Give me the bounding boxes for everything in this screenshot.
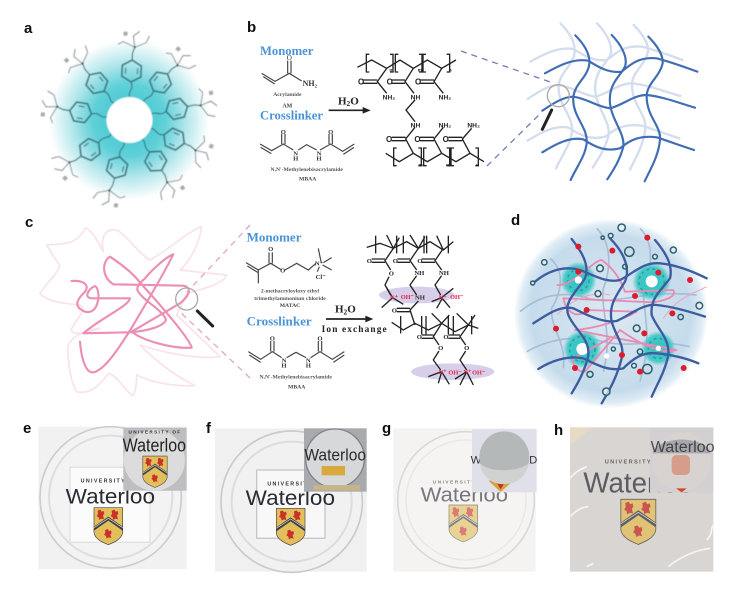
acrylamide molecule: Acrylamide [273,92,302,98]
zoom lines for panel c [180,225,250,378]
MBAA molecule: N,N'-Methylenebisacrylamide [259,374,332,380]
quaternised polymer structure: NH [439,270,450,277]
magnifier [542,85,569,129]
crosslinked polyacrylamide structure: m [446,163,451,169]
quaternised polymer structure: O [417,258,423,265]
photo g: UNIVERSITY [433,479,476,485]
photo f: Waterloo [246,486,335,510]
crosslinker heading: Crosslinker [247,313,312,328]
panel labels [23,19,563,439]
MATAC molecule: Cl⁻ [316,274,326,281]
quaternised polymer structure: O [389,270,394,277]
H2O reaction arrow: 2 [347,99,351,108]
crosslinked polyacrylamide structure [357,54,484,169]
photo e [38,427,187,569]
panel a: functionalised nanoparticle [39,30,219,210]
red ions [553,235,693,375]
quaternised polymer structure: O [443,334,449,341]
photos e and f [38,427,367,572]
magnifier [176,288,213,326]
quaternised polymer structure: OH⁻ [472,369,485,376]
MBAA molecule: O [317,335,323,342]
crosslinker heading: Crosslinker [260,108,323,122]
quaternised polymer structure: O [393,258,398,265]
acrylamide molecule: AM [282,104,293,110]
quaternised polymer structure: O [367,258,372,265]
H2O ion exchange arrow: O [347,304,356,316]
acrylamide molecule: O [287,53,292,62]
crosslinked polyacrylamide structure: n [389,68,392,74]
MBAA molecule: H [281,363,287,370]
photo h: Waterloo [583,468,693,500]
quaternised polymer structure: O [464,345,469,352]
quaternised polymer structure: NH [415,295,426,302]
monomer heading: Monomer [247,230,302,245]
MBAA molecule: N [306,357,311,364]
panel labels: c [25,214,33,231]
crosslinked polyacrylamide structure: O [358,78,364,87]
pink polymer chain [557,260,677,372]
MATAC molecule [246,246,332,309]
panel d: composite hydrogel sphere [514,219,708,409]
MATAC molecule: O [280,267,285,274]
panel labels: d [511,212,520,229]
arms: benzyl ammonium brushes [39,30,219,210]
inset [650,428,715,492]
MBAA molecule: H [293,156,299,163]
monomer heading: Monomer [260,44,314,58]
inset: Waterloo [651,439,715,456]
photo h [570,427,715,572]
quaternised polymer structure: N⁺ [439,295,447,302]
photo f [215,428,367,572]
inset [304,428,367,492]
quaternised polymer structure: N⁺ [439,369,447,376]
light rear network [528,23,683,170]
MATAC molecule: MATAC [280,303,300,309]
crosslinked polyacrylamide structure: NH [411,94,420,101]
H2O reaction arrow [329,95,371,114]
crosslinked polyacrylamide structure: n [476,163,479,169]
crosslinked polyacrylamide structure: O [386,135,392,144]
photo f: UNIVERSITY [267,481,313,487]
MBAA molecule [260,129,354,182]
crosslinked polyacrylamide structure: NH [411,122,420,129]
H2O reaction arrow: O [350,95,359,107]
inset: Waterloo [123,434,186,455]
panel labels: e [23,420,31,437]
crosslinked polyacrylamide structure: O [387,78,393,87]
panel b: chemistry [260,44,484,182]
MBAA molecule: MBAA [288,384,306,390]
quaternised polymer structure: N⁺ [463,369,471,376]
crosslinked polyacrylamide structure: m [418,68,423,74]
panel labels: h [554,422,563,439]
crosslinked polyacrylamide structure: n [449,68,452,74]
MBAA molecule: N [317,150,322,157]
inset: W D [471,454,537,466]
panel c: polymer scribble [40,227,227,395]
photo g: Waterloo [421,484,508,507]
quaternised polymer structure: N⁺ [390,295,398,302]
quaternised polymer structure: NH [414,270,425,277]
zoom lines for panel b [461,51,553,166]
quaternised polymer structure: O [392,307,397,314]
inset [471,429,537,492]
panel b: hydrogel network [528,23,697,181]
dark blue network [533,238,707,403]
water bubbles [531,224,703,395]
MBAA molecule: H [316,156,322,163]
quaternised polymer structure: O [438,345,443,352]
quaternised polymer structure: OH⁻ [450,294,463,301]
quaternised polymer structure: OH⁻ [401,294,414,301]
crosslinked polyacrylamide structure: O [415,78,421,87]
MBAA molecule: MBAA [299,176,317,182]
MBAA molecule: O [270,335,275,342]
crosslinked polyacrylamide structure: O [414,135,421,144]
panel labels: f [206,420,212,437]
crosslinked polyacrylamide structure: NH₂ [439,94,451,101]
white particle cores [575,275,661,359]
white core [106,97,152,143]
crosslinked polyacrylamide structure: O [443,135,449,144]
acrylamide molecule [262,53,318,110]
H2O reaction arrow: H [338,95,347,107]
MBAA molecule: N [282,357,287,364]
quaternised polymer structure [367,235,485,385]
crosslinked polyacrylamide structure: NH₂ [439,122,451,129]
inset [123,428,187,491]
dark front chain [72,254,192,372]
MBAA molecule: O [328,129,333,136]
light rear network [520,228,697,382]
photo e: UNIVERSITY [81,479,126,485]
light rear chain [40,227,227,395]
H2O ion exchange arrow: H [335,304,344,316]
crosslinked polyacrylamide structure: NH₂ [383,94,395,101]
teal nanoparticle glows [560,262,676,368]
MBAA molecule: N,N'-Methylenebisacrylamide [270,167,343,173]
dark front network [542,35,697,181]
inset: Waterloo [304,446,366,465]
photo g [393,428,537,572]
photo e: Waterloo [66,484,155,508]
quaternised polymer structure: OH⁻ [448,369,462,376]
MBAA molecule: O [281,129,286,136]
MATAC molecule: O [268,246,273,253]
MATAC molecule: trimethylammonium chloride [254,296,326,302]
photos g and h [393,427,715,572]
crosslinked polyacrylamide structure: m [418,163,423,169]
panel labels: g [382,420,391,437]
quaternised polymer structure: O [417,334,422,341]
H2O ion exchange arrow: 2 [344,307,348,316]
photo h: UNIVERSITY [605,459,652,465]
H2O ion exchange arrow [322,304,387,335]
acrylamide molecule: NH₂ [303,79,318,88]
panel c: chemistry [246,230,494,390]
crosslinked polyacrylamide structure: NH₂ [467,122,480,129]
MBAA molecule [248,335,344,390]
MBAA molecule: H [306,363,312,370]
MATAC molecule: N⁺ [315,261,324,268]
MATAC molecule: 2-methacryloyloxy ethyl [261,288,320,294]
inset: UNIVERSITY OF [129,429,181,434]
MBAA molecule: N [293,150,298,157]
purple charge ellipses [379,287,494,380]
panel labels: b [247,19,256,36]
panel labels: a [24,20,33,37]
H2O ion exchange arrow: Ion exchange [322,325,387,335]
